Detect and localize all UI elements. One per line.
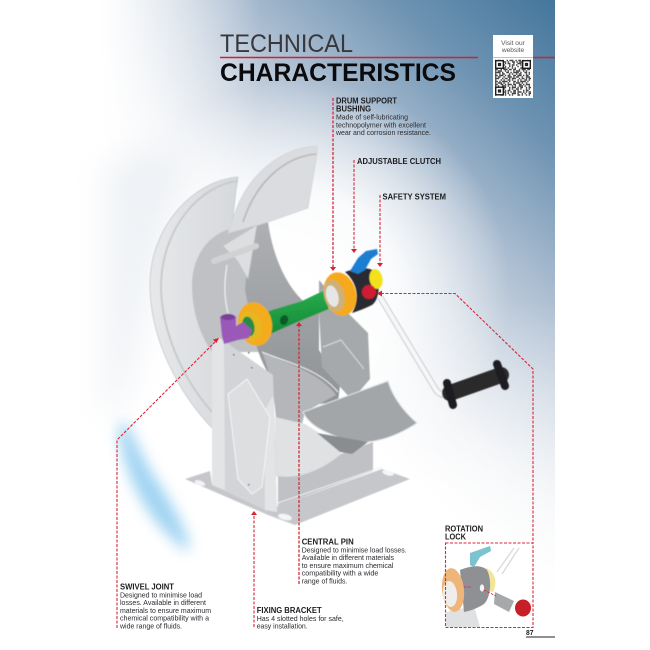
label: central pin: Available in different materials (302, 553, 394, 562)
inset grey body (460, 566, 490, 612)
inset crank lines (497, 548, 519, 574)
red safety knob (362, 285, 376, 299)
drum interior (245, 222, 340, 406)
rear lower bracket (278, 442, 373, 506)
grey swoosh (105, 151, 185, 420)
blue clutch lever (350, 249, 378, 274)
label: drum support bushing: technopolymer with excellent (336, 120, 426, 130)
inset orange bushing (440, 567, 466, 613)
inset dashed pointer (464, 587, 496, 596)
rear axle (214, 246, 256, 261)
title: TECHNICAL (220, 30, 353, 58)
title: CHARACTERISTICS (220, 59, 456, 87)
label: central pin: compatibility with a wide (302, 569, 378, 578)
crank handle (447, 364, 505, 405)
label: rotation lock: ROTATION (445, 525, 483, 534)
pin slot (279, 314, 289, 326)
label: safety system: SAFETY SYSTEM (382, 192, 446, 202)
label: central pin: CENTRAL PIN (302, 538, 354, 546)
lower drum band (262, 352, 336, 432)
leader: central pin (298, 326, 300, 584)
inset yellow cap (484, 568, 495, 592)
drum highlight (262, 352, 338, 392)
label: central pin: range of fluids. (302, 576, 347, 585)
QR panel (493, 35, 533, 98)
base slot left (194, 479, 206, 487)
arrowheads (213, 249, 383, 515)
rear disc (150, 177, 240, 430)
label: swivel joint (119, 582, 211, 630)
page number: 87 (526, 628, 534, 637)
crank arm (380, 297, 450, 395)
label: fixing bracket: Has 4 slotted holes for safe, (257, 614, 344, 623)
right support bracket (319, 280, 370, 400)
label: drum support bushing (335, 96, 431, 137)
label: fixing bracket: FIXING BRACKET (257, 606, 322, 615)
inset lock pin (494, 592, 514, 612)
leader: swivel joint (117, 342, 215, 628)
label: drum support bushing: Made of self-lubricating (336, 112, 408, 122)
flange lower hub (317, 433, 368, 454)
bracket fold line (323, 340, 364, 369)
front flange upper (228, 146, 317, 233)
page background (95, 0, 555, 650)
green central pin (262, 290, 329, 335)
inset clutch lever (470, 546, 491, 567)
leader: fixing bracket (253, 515, 255, 627)
base rail highlight (278, 467, 382, 503)
inset bushing centre (442, 580, 458, 608)
QR caption: Visit our (501, 40, 526, 47)
label: swivel joint: losses. Available in different (120, 598, 206, 607)
QR finder marks (496, 61, 530, 95)
label: swivel joint: Designed to minimise load (120, 590, 202, 600)
label: rotation lock: LOCK (445, 532, 466, 542)
QR code (495, 60, 531, 95)
label: central pin: to ensure maximum chemical (302, 561, 394, 570)
label: swivel joint: materials to ensure maximum (120, 606, 211, 615)
right orange bushing (319, 269, 361, 319)
bracket side fold (212, 338, 225, 490)
purple swivel joint (220, 314, 252, 344)
rear disc inner face (192, 226, 292, 352)
rear axle mount (223, 225, 257, 279)
label: fixing bracket: easy installation. (257, 622, 308, 630)
left yellow bushing (234, 299, 276, 349)
leader lines (117, 98, 533, 628)
base slot front (278, 513, 292, 521)
front flange rim (243, 154, 316, 222)
leader: adjustable clutch (353, 160, 355, 249)
rotation lock inset (440, 543, 533, 628)
label: drum support bushing: wear and corrosion resistance. (335, 128, 431, 137)
label: fixing bracket (257, 606, 344, 630)
label: adjustable clutch: ADJUSTABLE CLUTCH (357, 157, 441, 166)
thin hose (225, 265, 228, 313)
black clutch body (345, 268, 379, 313)
inset hub shadow (446, 606, 480, 627)
inset socket (480, 584, 484, 592)
base plate (185, 469, 410, 525)
leader: drum support bushing (332, 98, 334, 267)
lower white drum (275, 417, 341, 478)
rear disc rim (161, 181, 238, 412)
inset frame (446, 543, 533, 628)
label: swivel joint: SWIVEL JOINT (120, 582, 174, 592)
bracket holes (233, 352, 252, 486)
label: drum support bushing: DRUM SUPPORT (336, 96, 397, 106)
label: swivel joint: wide range of fluids. (119, 622, 182, 630)
page number (526, 628, 555, 637)
leader: safety system (379, 195, 381, 263)
title (220, 30, 456, 87)
label: swivel joint: chemical compatibility with a (120, 614, 210, 622)
leader: rotation lock (381, 294, 533, 543)
front flange lower (303, 381, 417, 442)
yellow safety cap (368, 268, 384, 290)
reel assembly (150, 146, 505, 525)
left support bracket (212, 338, 277, 512)
blue light streak (118, 420, 189, 552)
inset red knob (515, 600, 531, 616)
bracket raised panel (228, 379, 270, 494)
label: drum support bushing: BUSHING (336, 104, 371, 114)
label: central pin: Designed to minimise load losses. (302, 545, 407, 554)
base slot right (382, 469, 394, 477)
QR caption: website (501, 47, 525, 54)
label: rotation lock (445, 525, 483, 542)
title rule (220, 56, 555, 58)
label: central pin (302, 538, 407, 585)
bracket right fold (264, 395, 277, 512)
right bushing shaft (323, 283, 347, 309)
